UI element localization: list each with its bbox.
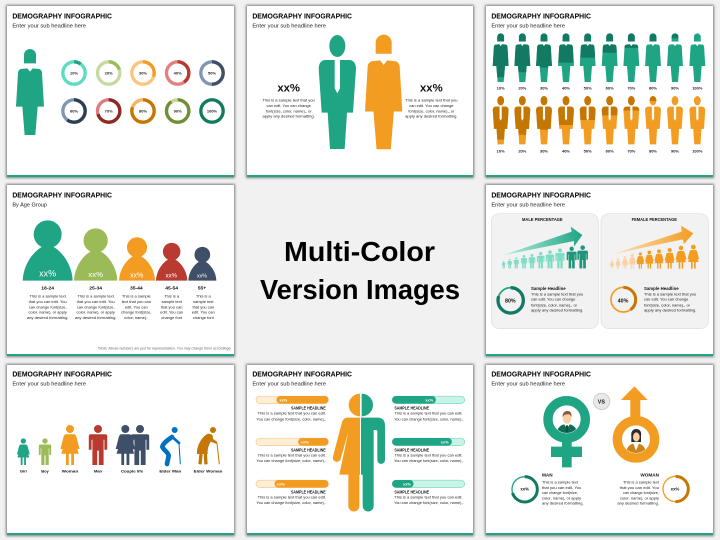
age group descriptions: that you can edit. You — [77, 299, 115, 304]
slide 7 subtitle: Enter your sub headline here — [12, 382, 86, 388]
male percentage labels — [497, 148, 703, 153]
icon: female figure — [16, 49, 44, 135]
age group descriptions: color, name), or apply — [29, 310, 67, 315]
left bar 1: xx% — [279, 397, 288, 402]
slide 6: male and female percentage panels — [485, 184, 714, 357]
icon: couple — [116, 425, 149, 465]
right text 2: You can change font(size, color, name),. — [394, 458, 464, 463]
age group descriptions: edit. You can — [125, 304, 148, 309]
female percentage text: xx% — [420, 83, 443, 95]
donut 80% — [132, 100, 154, 122]
pictogram labels: Woman — [62, 469, 79, 474]
age blob 18-24 — [23, 220, 73, 281]
donut 100% — [201, 100, 223, 122]
icon: boy — [39, 438, 51, 465]
age labels: 18-24 — [41, 285, 54, 291]
left text 3 — [256, 489, 326, 505]
right bar 3 — [392, 480, 465, 488]
woman text: color, name), or apply — [620, 495, 659, 500]
age group descriptions: This is a sample text — [78, 294, 115, 299]
slide 2 title: DEMOGRAPHY INFOGRAPHIC — [252, 12, 352, 21]
arrow: female growth — [613, 226, 693, 254]
age blob 35-44 — [119, 237, 155, 281]
left bar 3 — [256, 480, 328, 488]
age blob 45-54 — [156, 243, 187, 281]
age blob 55+: xx% — [197, 274, 207, 280]
left text 3: You can change font(size, color, name),. — [256, 500, 326, 505]
panel: female percentage — [601, 214, 708, 329]
female percentage text: font(size, color, name),, or — [408, 108, 455, 113]
right bar 2 — [392, 438, 465, 446]
left text 2 — [256, 447, 326, 463]
slide 4 title: DEMOGRAPHY INFOGRAPHIC — [12, 191, 112, 200]
donut 20% — [97, 62, 120, 84]
slide 1: donut percentages — [6, 5, 235, 178]
right text 2: This is a sample text that you can edit. — [394, 453, 463, 458]
right text 1 — [394, 405, 464, 421]
icon: VS badge: VS — [598, 399, 605, 405]
female panel text — [644, 286, 696, 313]
female percentage labels — [497, 86, 703, 91]
male panel text: can edit. You can change — [531, 297, 576, 302]
age blob 18-24: xx% — [39, 268, 56, 278]
age group descriptions: sample text — [193, 299, 214, 304]
woman text: WOMAN — [640, 473, 660, 478]
pictogram labels: Couple life — [121, 469, 144, 474]
slide 8 title: DEMOGRAPHY INFOGRAPHIC — [252, 370, 352, 379]
male figures row — [493, 96, 705, 144]
male percentage text — [262, 83, 315, 119]
male panel text — [531, 286, 583, 313]
male panel text: font(size, color, name),, or — [531, 302, 578, 307]
donut 70% — [97, 100, 120, 122]
donut 60% — [63, 100, 85, 122]
left bar 1 — [256, 396, 328, 404]
left text 2: This is a sample text that you can edit. — [258, 453, 326, 458]
pictogram labels: Elder Woman — [194, 469, 223, 474]
donut 10% — [63, 62, 85, 84]
man text — [542, 473, 584, 506]
age group descriptions: can change font(size, — [29, 304, 67, 309]
age labels: 45-54 — [165, 285, 178, 291]
age labels: 55+ — [198, 285, 206, 291]
male percentage text: This is a sample text that you — [262, 98, 315, 103]
age group descriptions: that you can edit. You — [29, 299, 67, 304]
female percentage text: This is a sample text that you — [405, 98, 457, 103]
male half figure — [361, 394, 385, 511]
left text 2: SAMPLE HEADLINE — [291, 447, 326, 452]
right text 3: This is a sample text that you can edit. — [394, 495, 463, 500]
age group descriptions: any desired formatting. — [27, 315, 68, 320]
pictogram labels: Girl — [20, 469, 27, 474]
female percentage labels: 70% — [627, 86, 636, 91]
donut 90%: 90% — [174, 108, 182, 113]
slide 9 subtitle: Enter your sub headline here — [491, 382, 565, 388]
male panel text: apply any desired formatting. — [531, 308, 583, 313]
age group descriptions: edit. You can — [160, 310, 183, 315]
female percentage labels: 10% — [497, 86, 505, 91]
woman text: that you can edit. You — [620, 485, 659, 490]
donut 80%: 80% — [139, 108, 147, 113]
age group descriptions: sample text — [161, 299, 183, 304]
right bar 3: xx% — [403, 481, 411, 486]
donut 40%: 40% — [174, 70, 182, 75]
icon: elder woman — [197, 427, 219, 464]
woman text: any desired formatting. — [617, 501, 659, 506]
male percentage labels: 70% — [627, 148, 636, 153]
female half figure — [333, 394, 360, 511]
age labels: 35-44 — [130, 285, 143, 291]
pictogram labels: Man — [94, 469, 103, 474]
icon: man — [89, 425, 107, 465]
slide 2: male and female — [246, 5, 474, 178]
donut 60%: 60% — [70, 108, 78, 113]
left bar 2 — [256, 438, 328, 446]
donut 30% — [132, 62, 154, 84]
man text: color, name), or apply — [542, 495, 581, 500]
icon: VS badge — [593, 393, 610, 409]
right text 3: You can change font(size, color, name),. — [394, 500, 464, 505]
man donut: xx% — [520, 487, 529, 492]
woman text — [617, 473, 660, 506]
donut 40% — [166, 62, 189, 84]
female percentage text: apply any desired formatting. — [405, 114, 457, 119]
female panel heading: FEMALE PERCENTAGE — [632, 217, 677, 222]
arrow: male growth — [503, 227, 582, 255]
age blob 55+ — [188, 247, 216, 281]
age labels — [41, 285, 206, 291]
age group descriptions: This is a — [196, 294, 212, 299]
right text 1: You can change font(size, color, name),. — [394, 416, 464, 421]
right text 3: SAMPLE HEADLINE — [394, 489, 429, 494]
pictogram labels: Elder Man — [159, 469, 182, 474]
female percentage labels: 20% — [518, 86, 527, 91]
donut 90% — [166, 100, 189, 122]
female percentage labels: 40% — [562, 86, 570, 91]
age group descriptions: change font(size, — [121, 310, 152, 315]
man text: any desired formatting. — [542, 501, 584, 506]
right text 1: This is a sample text that you can edit. — [394, 411, 463, 416]
right text 3 — [394, 489, 464, 505]
slide 4 subtitle: By Age Group — [12, 203, 47, 209]
male figure — [319, 35, 356, 149]
left text 3: SAMPLE HEADLINE — [291, 489, 326, 494]
female panel text: Sample Headline — [644, 286, 679, 291]
female panel text: can edit. You can change — [644, 297, 689, 302]
donut 70%: 70% — [105, 108, 113, 113]
right text 2: SAMPLE HEADLINE — [394, 447, 429, 452]
male percentage labels: 100% — [692, 148, 703, 153]
male panel text: Sample Headline — [531, 286, 566, 291]
male panel heading: MALE PERCENTAGE — [522, 217, 563, 222]
male percentage labels: 40% — [562, 148, 570, 153]
pictogram labels: Boy — [41, 469, 50, 474]
slide 7 title: DEMOGRAPHY INFOGRAPHIC — [12, 370, 112, 379]
slide 6 subtitle: Enter your sub headline here — [491, 203, 565, 209]
age group descriptions: that you can — [192, 304, 214, 309]
donut 40%: 40% — [618, 298, 629, 304]
donut 50%: 50% — [208, 70, 216, 75]
woman text: can change font(size, — [623, 490, 659, 495]
female figure — [365, 35, 402, 149]
female panel text: apply any desired formatting. — [644, 308, 696, 313]
age group descriptions: This is a sample — [122, 294, 152, 299]
man donut — [512, 477, 537, 502]
slide 8: split figure with bars — [246, 364, 474, 536]
male percentage text: xx% — [277, 83, 300, 95]
slide 2 subtitle: Enter your sub headline here — [252, 24, 326, 30]
left text 1: You can change font(size, color, name),. — [256, 416, 326, 421]
slide 9: gender symbols — [485, 364, 714, 536]
right bar 1: xx% — [425, 397, 434, 402]
left text 1: SAMPLE HEADLINE — [291, 405, 326, 410]
woman donut — [663, 476, 688, 502]
right text 2 — [394, 447, 464, 463]
female panel text: This is a sample text that you — [644, 291, 696, 296]
female percentage labels: 80% — [649, 86, 657, 91]
female figures row — [610, 245, 699, 269]
age labels: 25-34 — [89, 285, 102, 291]
pictogram labels — [20, 469, 223, 474]
male percentage labels: 80% — [649, 148, 657, 153]
female percentage text: can edit. You can change — [409, 103, 454, 108]
donut 30%: 30% — [139, 70, 147, 75]
icon: orange gender symbol with woman avatar — [617, 386, 655, 458]
male percentage labels: 10% — [497, 148, 505, 153]
male percentage text: apply any desired formatting. — [262, 114, 315, 119]
age group descriptions: can change font(size, — [77, 304, 115, 309]
panel: male percentage — [491, 214, 598, 329]
donut 10%: 10% — [70, 70, 78, 75]
male panel text: This is a sample text that you — [531, 291, 583, 296]
male percentage text: can edit. You can change — [266, 103, 312, 108]
female percentage labels: 30% — [540, 86, 548, 91]
age group descriptions: color, name),. — [124, 315, 148, 320]
left bar 3: xx% — [277, 481, 285, 486]
female percentage labels: 50% — [584, 86, 592, 91]
male figures row — [502, 245, 588, 268]
male percentage text: font(size, color, name),, or — [266, 108, 312, 113]
slide 8 subtitle: Enter your sub headline here — [252, 382, 326, 388]
slide 9 title: DEMOGRAPHY INFOGRAPHIC — [491, 370, 591, 379]
age group descriptions: change font — [193, 315, 215, 320]
age group descriptions: This is a — [164, 294, 180, 299]
icon: woman — [60, 425, 80, 465]
slide 3 subtitle: Enter your sub headline here — [491, 24, 565, 30]
slide 3: percentage figures — [485, 5, 714, 178]
woman text: This is a sample text — [623, 480, 660, 485]
man text: This is a sample text — [542, 480, 579, 485]
age group descriptions: edit. You can — [192, 310, 215, 315]
male percentage labels: 20% — [518, 148, 527, 153]
age blob 45-54: xx% — [166, 273, 178, 279]
icon: elder man — [162, 427, 180, 464]
donut 100%: 100% — [207, 108, 218, 113]
age group descriptions: change font — [161, 315, 183, 320]
donut charts — [63, 62, 223, 122]
footnote: *Note: Above numbers are just for representation. You may change them accordingly. — [98, 347, 232, 351]
left bar 2: xx% — [301, 439, 309, 444]
right text 1: SAMPLE HEADLINE — [394, 405, 429, 410]
female percentage labels: 60% — [606, 86, 614, 91]
male percentage labels: 90% — [671, 148, 679, 153]
female percentage labels: 90% — [671, 86, 679, 91]
left text 3: This is a sample text that you can edit. — [258, 495, 326, 500]
left text 1 — [256, 405, 326, 421]
age blob 25-34: xx% — [88, 270, 103, 279]
center panel: multi-color heading — [260, 236, 460, 305]
slide 3 title: DEMOGRAPHY INFOGRAPHIC — [491, 12, 591, 21]
age group descriptions: This is a sample text — [30, 294, 67, 299]
center panel: multi-color heading: Multi-Color — [284, 236, 435, 267]
male percentage labels: 30% — [540, 148, 548, 153]
slide 1 title: DEMOGRAPHY INFOGRAPHIC — [12, 12, 112, 21]
age group descriptions: text that you can — [122, 299, 151, 304]
donut 50% — [201, 62, 223, 84]
right bar 1 — [392, 396, 465, 404]
man text: can change font(size, — [542, 490, 578, 495]
female percentage labels: 100% — [692, 86, 703, 91]
man text: that you can edit. You — [542, 485, 581, 490]
left text 2: You can change font(size, color, name),. — [256, 458, 326, 463]
age blob 35-44: xx% — [130, 272, 143, 279]
right bar 2: xx% — [441, 439, 449, 444]
icon: girl — [17, 438, 30, 465]
donut 80%: 80% — [505, 298, 516, 304]
man text: MAN — [542, 473, 553, 478]
age blob 25-34 — [74, 228, 117, 281]
slide 4: by age group — [6, 184, 235, 357]
female percentage text — [405, 83, 457, 119]
donut 20%: 20% — [105, 70, 113, 75]
male percentage labels: 50% — [584, 148, 592, 153]
slide 1 subtitle: Enter your sub headline here — [12, 24, 86, 30]
left text 1: This is a sample text that you can edit. — [258, 411, 326, 416]
male percentage labels: 60% — [606, 148, 614, 153]
slide 6 title: DEMOGRAPHY INFOGRAPHIC — [491, 191, 591, 200]
age group descriptions: that you can — [161, 304, 183, 309]
age group descriptions: any desired formatting. — [75, 315, 116, 320]
center panel: multi-color heading: Version Images — [260, 274, 460, 305]
age group descriptions — [27, 294, 215, 320]
icon: teal gender symbol with man avatar — [548, 401, 585, 467]
female panel text: font(size, color, name),, or — [644, 302, 691, 307]
female figures row — [493, 33, 705, 82]
age group descriptions: color, name), or apply — [77, 310, 115, 315]
slide 7: people pictograms — [6, 364, 235, 536]
woman donut: xx% — [671, 486, 679, 491]
